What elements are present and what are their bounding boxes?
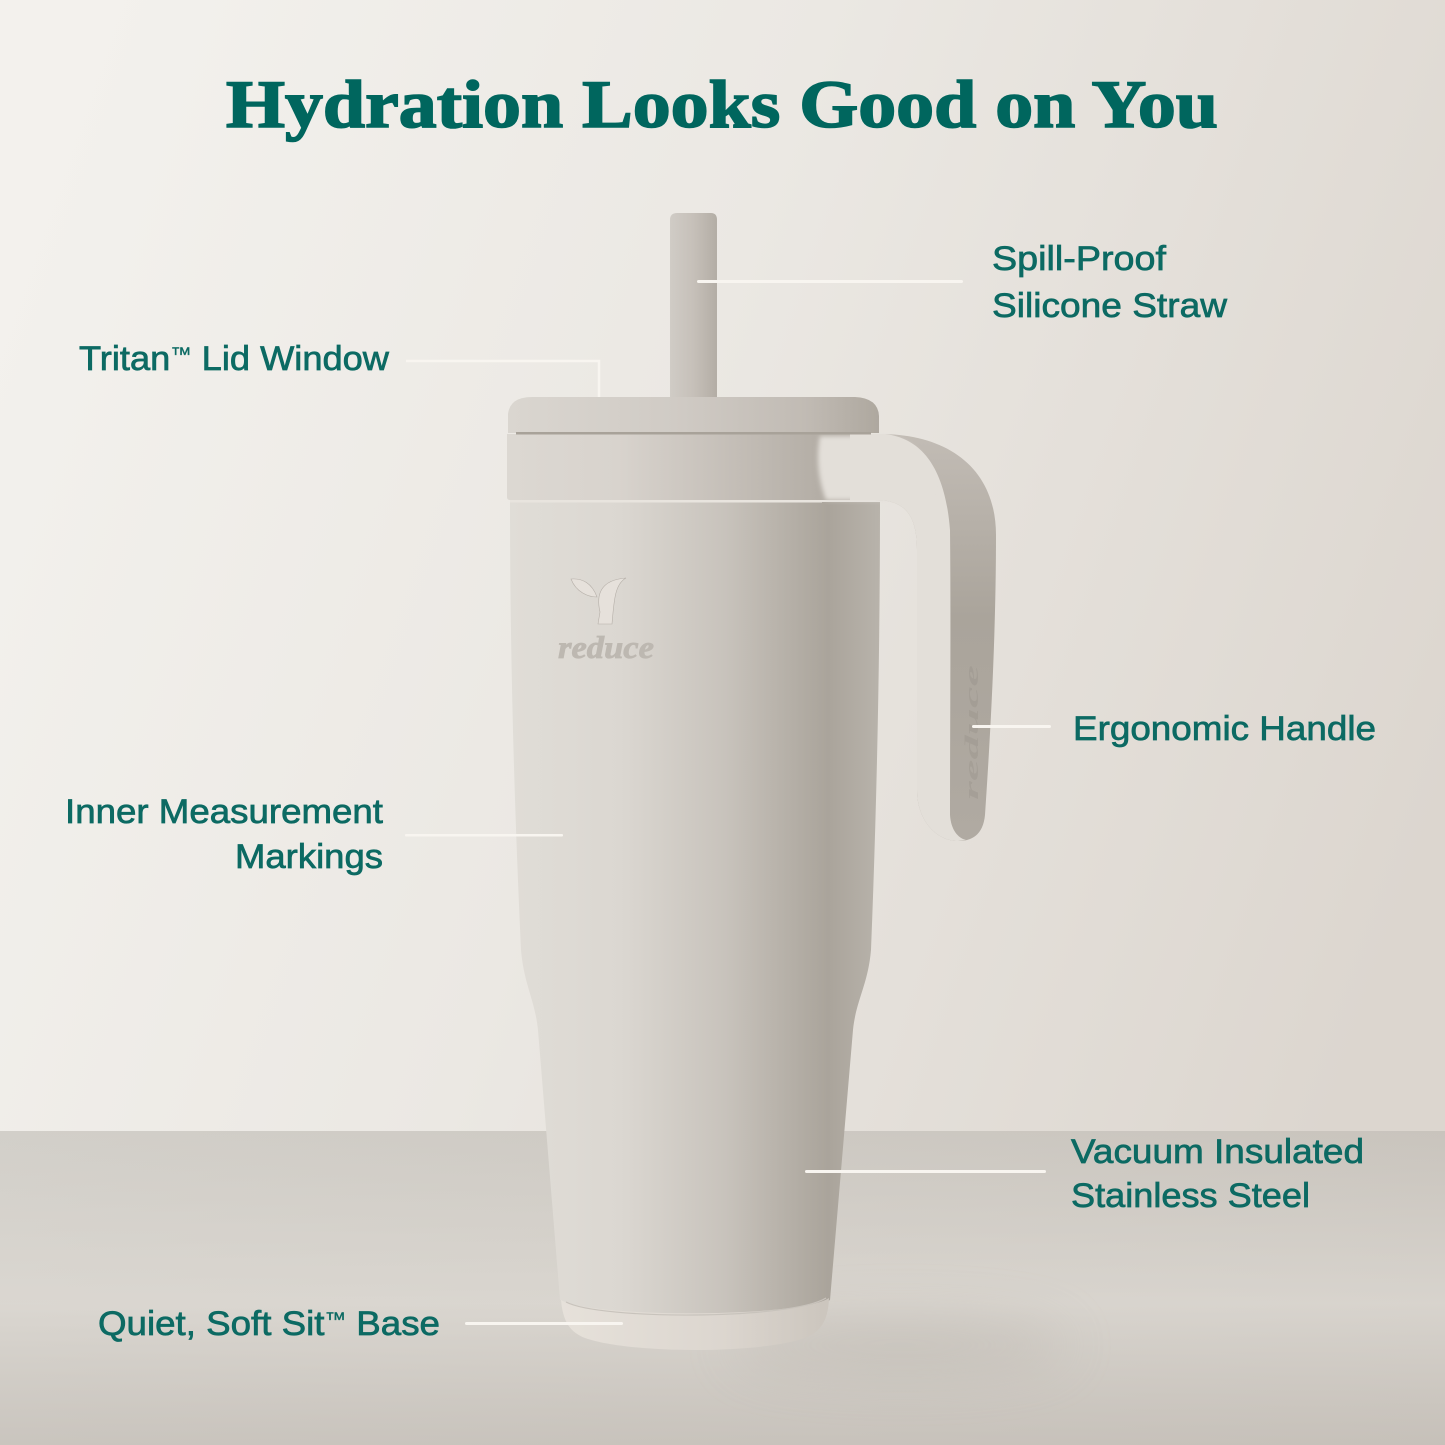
handle embossed wordmark: reduce: [962, 664, 983, 800]
lid gap: [516, 432, 871, 434]
callout: Spill-Proof Silicone Straw: Silicone Straw: [992, 287, 1227, 325]
logo: [558, 578, 654, 665]
tumbler body: [510, 502, 880, 1314]
callout: Vacuum Insulated Stainless Steel: Vacuum Insulated: [1071, 1133, 1364, 1171]
tumbler: [507, 213, 996, 1350]
callout: Inner Measurement Markings: Inner Measurement: [65, 793, 384, 831]
callout: Spill-Proof Silicone Straw: Spill-Proof: [992, 240, 1167, 278]
callout: Tritan Lid Window: ™: [170, 344, 192, 366]
base: [561, 1298, 829, 1350]
callout: Quiet, Soft Sit Base: Base: [346, 1305, 440, 1343]
collar: [507, 434, 850, 500]
callout: Quiet, Soft Sit Base: ™: [325, 1309, 346, 1331]
logo wordmark: reduce: [558, 629, 654, 665]
title: Hydration Looks Good on You: [226, 66, 1218, 142]
logo leaf mark: [571, 578, 626, 624]
collar lower edge: [510, 500, 822, 502]
callout: Vacuum Insulated Stainless Steel: [805, 1133, 1364, 1215]
callout: Tritan Lid Window: [79, 340, 599, 397]
background wall: [0, 0, 1445, 1131]
callout: Quiet, Soft Sit Base: [98, 1305, 623, 1343]
callout: Spill-Proof Silicone Straw: [697, 240, 1227, 325]
floor shadow: [730, 1319, 1070, 1371]
callout: Ergonomic Handle: [972, 710, 1376, 748]
callout: Inner Measurement Markings: Markings: [235, 838, 383, 876]
icon: silicone straw: [670, 213, 717, 398]
lid: [508, 397, 879, 433]
callout: Inner Measurement Markings: [65, 793, 563, 876]
callout: Ergonomic Handle: Ergonomic Handle: [1073, 710, 1376, 748]
callout: Vacuum Insulated Stainless Steel: Stainless Steel: [1071, 1177, 1310, 1215]
handle: [815, 434, 996, 841]
callout: Tritan Lid Window: Lid Window: [192, 340, 389, 378]
callout: Tritan Lid Window: Tritan: [79, 340, 165, 378]
callout: Quiet, Soft Sit Base: Quiet, Soft Sit: [98, 1305, 308, 1343]
background floor: [0, 1131, 1445, 1445]
handle front overlap: [818, 436, 932, 500]
base seam: [566, 1298, 826, 1315]
